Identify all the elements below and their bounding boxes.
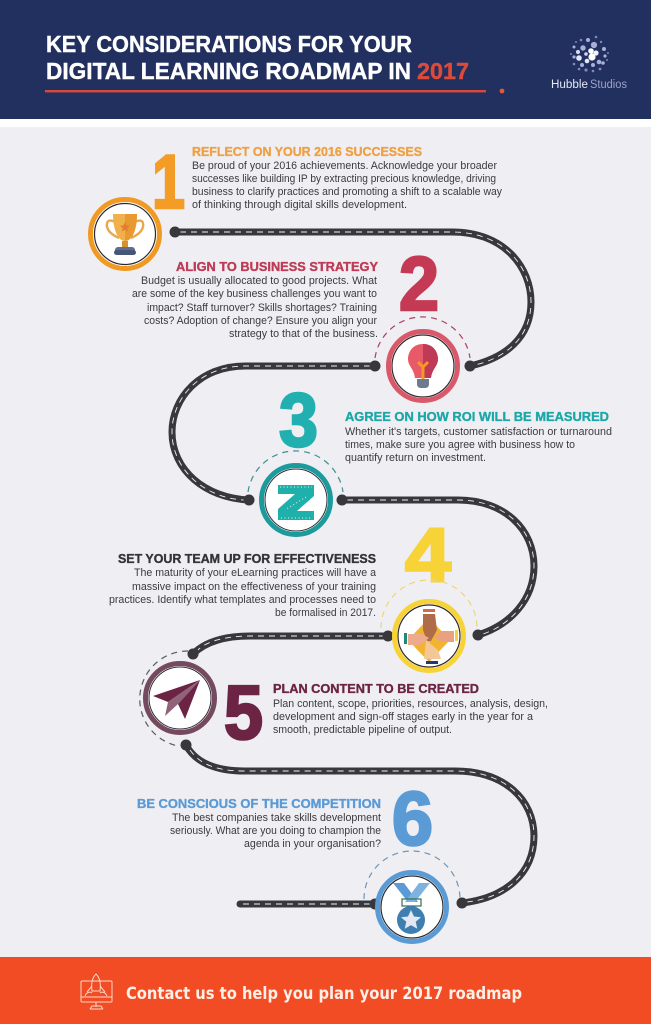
heading 6: BE CONSCIOUS OF THE COMPETITION	[137, 797, 381, 811]
text 4: be formalised in 2017.	[275, 607, 376, 619]
icon: light bulb	[388, 332, 458, 400]
icon: paper plane	[146, 664, 214, 732]
text 3: quantify return on investment.	[345, 452, 486, 464]
icon: measuring tape Z	[262, 466, 330, 534]
heading 3: AGREE ON HOW ROI WILL BE MEASURED	[345, 410, 609, 424]
title: 2017	[417, 58, 469, 84]
text 4: practices. Identify what templates and processes need to	[109, 594, 376, 606]
icon: hands together	[394, 602, 464, 670]
text 3	[345, 426, 612, 464]
step 1: reflect	[90, 140, 503, 268]
dashed arc 6	[364, 851, 460, 899]
text 2: impact? Staff turnover? Skills shortages? Training	[147, 302, 377, 314]
road	[170, 226, 534, 910]
number 4: 4	[405, 513, 451, 598]
number 2: 2	[399, 242, 439, 327]
step 6: competition	[137, 777, 460, 942]
text 2: costs? Adoption of change? Ensure you align your	[144, 315, 377, 327]
logo: Hubble Studios	[551, 36, 627, 91]
dashed arc 2	[375, 317, 470, 358]
title: DIGITAL LEARNING ROADMAP IN	[46, 58, 411, 84]
text 2: strategy to that of the business.	[229, 328, 378, 340]
number 6: 6	[392, 777, 433, 862]
text 6	[170, 812, 381, 850]
text 3: Whether it's targets, customer satisfaction or turnaround	[345, 426, 612, 438]
header banner	[0, 0, 651, 119]
text 6: seriously. What are you doing to champion the	[170, 825, 381, 837]
text 6: The best companies take skills development	[172, 812, 381, 824]
number 1: 1	[152, 140, 185, 225]
heading 1: REFLECT ON YOUR 2016 SUCCESSES	[192, 145, 422, 159]
number 5: 5	[224, 671, 263, 756]
heading 2: ALIGN TO BUSINESS STRATEGY	[176, 260, 379, 274]
text 4: The maturity of your eLearning practices will have a	[134, 567, 376, 579]
heading 5: PLAN CONTENT TO BE CREATED	[273, 682, 479, 696]
dashed arc 5	[140, 651, 188, 746]
heading 4: SET YOUR TEAM UP FOR EFFECTIVENESS	[118, 552, 376, 566]
text 1: of thinking through digital skills development.	[192, 199, 407, 211]
text 1: Be proud of your 2016 achievements. Acknowledge your broader	[192, 160, 497, 172]
title	[46, 31, 469, 84]
text 4	[109, 567, 376, 619]
text 5	[273, 698, 548, 736]
text 3: times, make sure you agree with business how to	[345, 439, 575, 451]
step 3: ROI	[248, 378, 612, 534]
text 2: are some of the key business challenges you want to	[132, 288, 377, 300]
step 5: content	[140, 651, 548, 756]
logo: Hubble Studios: Hubble	[551, 77, 588, 91]
text 5: smooth, predictable pipeline of output.	[273, 724, 452, 736]
title underline	[45, 89, 504, 93]
text 6: agenda in your organisation?	[244, 838, 381, 850]
footer banner	[0, 957, 651, 1024]
step 2: strategy	[132, 242, 470, 400]
text 4: massive impact on the effectiveness of your training	[132, 581, 376, 593]
text 2	[132, 275, 378, 340]
dashed arc 3	[248, 451, 343, 492]
text 1: successes like building IP by extracting precious knowledge, driving	[192, 173, 496, 185]
number 3: 3	[279, 378, 318, 463]
icon: trophy	[90, 200, 160, 268]
step 4: team	[109, 513, 477, 670]
text 5: Plan content, scope, priorities, resources, analysis, design,	[273, 698, 548, 710]
title: KEY CONSIDERATIONS FOR YOUR	[46, 31, 412, 57]
icon: rocket on monitor	[81, 974, 112, 1009]
logo: Hubble Studios: Studios	[590, 77, 627, 91]
text 1	[192, 160, 503, 211]
icon: medal	[378, 872, 446, 942]
dashed arc 4	[381, 580, 477, 628]
call to action: Contact us to help you plan your 2017 roadmap	[126, 984, 522, 1003]
text 1: business to clarify practices and promoting a shift to a scalable way	[192, 186, 503, 198]
text 5: development and sign-off stages early in the year for a	[273, 711, 533, 723]
text 2: Budget is usually allocated to good projects. What	[141, 275, 377, 287]
